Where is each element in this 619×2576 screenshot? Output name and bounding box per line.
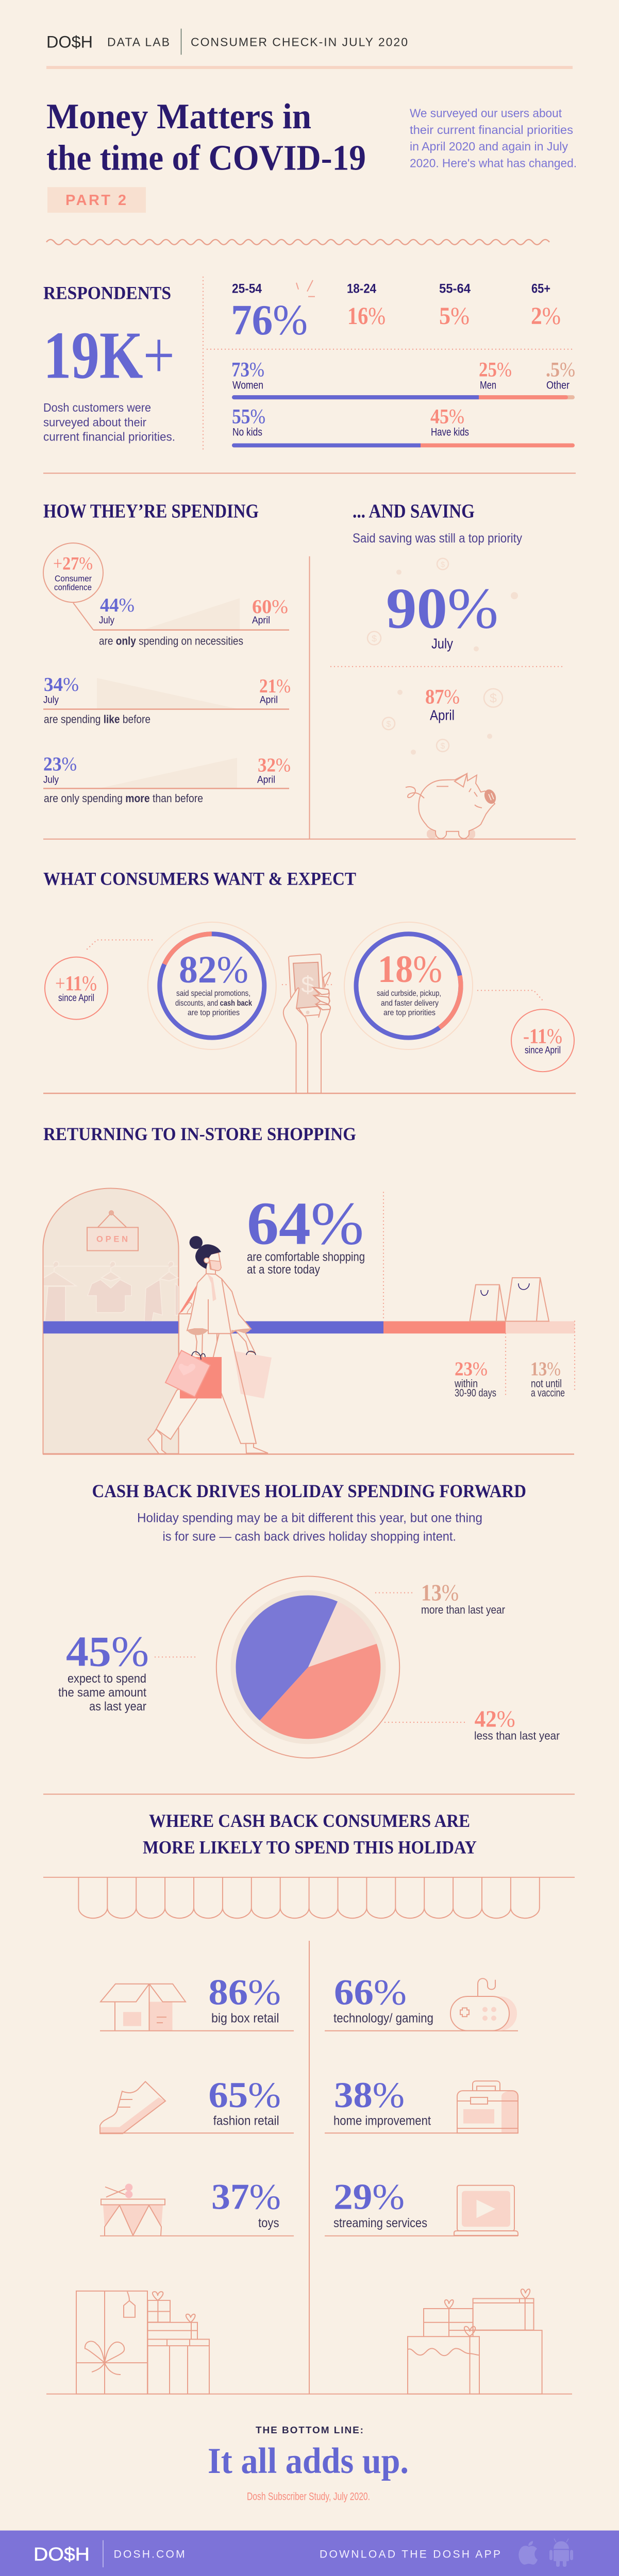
ring: 82 percent: are top priorities (188, 1009, 240, 1018)
row: more than before: 32% (258, 755, 291, 776)
23 percent stat: 30-90 days (455, 1387, 496, 1399)
gender split: Women (232, 379, 263, 391)
age groups: 2% (531, 302, 561, 330)
23 percent stat: within (454, 1378, 478, 1390)
kids split: 55% (232, 405, 265, 428)
panel: wants and expectations (45, 917, 574, 1093)
row: like before: April (260, 694, 278, 706)
panel: toys: 37% (211, 2176, 281, 2217)
website: DOSH.COM (114, 2548, 185, 2560)
panel: and saving (331, 500, 564, 839)
icon: piggy bank (406, 774, 498, 839)
intro paragraph: We surveyed our users about (410, 106, 562, 120)
row: necessities: 44% (100, 595, 135, 616)
april stat (425, 685, 460, 723)
clothes on rail (45, 1280, 178, 1321)
heading: what consumers want: WHAT CONSUMERS WANT & EXPECT (43, 869, 356, 889)
panel: streaming services: 29% (333, 2176, 405, 2217)
age groups: 5% (439, 302, 470, 330)
row: more than before: July (43, 774, 59, 785)
consumer confidence callout: confidence (54, 582, 92, 592)
intro paragraph: in April 2020 and again in July (410, 140, 568, 153)
title (46, 97, 366, 178)
label: 45 percent: the same amount (58, 1686, 146, 1700)
gender split (231, 358, 575, 399)
part 2 badge: PART 2 (65, 192, 126, 209)
callout: plus 11: +11% (55, 972, 97, 995)
ring: 82 percent: 82% (179, 948, 248, 991)
footer band (0, 2531, 619, 2576)
panel: technology and gaming (325, 1972, 518, 2031)
heading: holiday spending: CASH BACK DRIVES HOLIDAY SPENDING FORWARD (92, 1481, 526, 1501)
description (43, 401, 175, 443)
panel: technology and gaming: 66% (334, 1972, 407, 2012)
icon: box (101, 1984, 186, 2031)
panel: fashion retail (100, 2074, 294, 2133)
download call to action: DOWNLOAD THE DOSH APP (320, 2548, 500, 2560)
callout: minus 11 (478, 990, 574, 1072)
right bag (233, 1351, 272, 1398)
panel: how they're spending (43, 500, 291, 805)
panel: big box retail: big box retail (211, 2011, 279, 2026)
label: 13 percent: more than last year (421, 1603, 505, 1616)
heading: where cash back consumers: MORE LIKELY TO SPEND THIS HOLIDAY (143, 1837, 477, 1858)
label: 45 percent: as last year (89, 1700, 146, 1714)
row: more than before: are only spending more than before (44, 792, 203, 805)
shopper illustration (148, 1236, 272, 1454)
july stat: July (431, 636, 453, 651)
holiday intro (137, 1511, 482, 1544)
panel: fashion retail: fashion retail (213, 2114, 279, 2128)
13 percent stat (530, 1359, 565, 1399)
ring: 18 percent (344, 922, 473, 1049)
row: necessities (93, 595, 289, 647)
april stat: April (430, 707, 455, 723)
coat (187, 1274, 251, 1333)
description: surveyed about their (43, 416, 146, 429)
kids split: No kids (232, 427, 262, 438)
row: necessities: 60% (252, 596, 288, 618)
64 percent stat: are comfortable shopping (247, 1250, 365, 1264)
subheading: Said saving was still a top priority (353, 531, 522, 546)
icon: toolbox (457, 2081, 518, 2133)
part 2 badge (47, 187, 146, 213)
ring: 18 percent: and faster delivery (381, 999, 439, 1008)
gender split: 25% (479, 358, 512, 381)
gender split: Other (546, 379, 570, 391)
bottom line (208, 2425, 409, 2503)
13 percent stat: a vaccine (531, 1387, 565, 1399)
floating coins: $ (372, 634, 377, 644)
label: 13 percent (376, 1580, 505, 1616)
pie chart (216, 1577, 399, 1758)
hand holding phone: $ (301, 972, 314, 997)
heading: RESPONDENTS (43, 283, 171, 303)
icon: shopping bags (470, 1278, 549, 1321)
heading: where cash back consumers (143, 1810, 477, 1858)
13 percent stat: not until (531, 1378, 562, 1390)
row: like before: July (43, 694, 59, 706)
data lab label: DATA LAB (107, 35, 170, 48)
23 percent stat (454, 1359, 496, 1399)
description: current financial priorities. (43, 430, 175, 443)
big number: 19K+ (43, 318, 175, 393)
bags (180, 1357, 222, 1398)
heading: where cash back consumers: WHERE CASH BACK CONSUMERS ARE (149, 1810, 470, 1831)
wave divider (46, 240, 549, 245)
64 percent stat: at a store today (247, 1263, 320, 1277)
label: 42 percent: 42% (475, 1706, 515, 1732)
ring: 18 percent: said curbside, pickup, (377, 989, 441, 998)
intro paragraph (410, 106, 577, 170)
footer logo: DO$H (34, 2544, 90, 2565)
callout: plus 11 (45, 940, 152, 1020)
july stat: 90% (386, 577, 498, 641)
13 percent stat: 13% (530, 1359, 561, 1380)
consumer confidence callout: +27% (53, 553, 93, 574)
title: Money Matters in (46, 97, 311, 137)
panel: streaming services (325, 2176, 518, 2236)
label: 42 percent: less than last year (474, 1729, 560, 1742)
panel: big box retail (100, 1972, 294, 2031)
panel: respondents (43, 277, 575, 450)
heading: HOW THEY’RE SPENDING (43, 500, 259, 522)
row: necessities: April (252, 615, 270, 626)
64 percent stat: 64% (247, 1189, 364, 1258)
storefront arch (43, 1188, 178, 1454)
intro paragraph: their current financial priorities (410, 123, 573, 137)
floating coins: $ (441, 742, 445, 751)
row: more than before (43, 754, 291, 805)
logo: DO$H (46, 32, 93, 51)
holiday intro: is for sure — cash back drives holiday shopping intent. (163, 1529, 456, 1544)
ring: 18 percent: are top priorities (383, 1009, 436, 1018)
consumer confidence callout: Consumer (55, 573, 92, 583)
panel: in-store shopping (43, 1188, 575, 1454)
intro paragraph: 2020. Here's what has changed. (410, 157, 577, 170)
stacked bar (43, 1321, 575, 1333)
april stat: 87% (425, 685, 460, 708)
row: like before: 34% (44, 674, 79, 696)
floating coins: $ (387, 720, 391, 728)
kicker: THE BOTTOM LINE: (256, 2425, 363, 2436)
panel: home improvement: 38% (334, 2074, 405, 2115)
floating coins (367, 558, 518, 755)
panel: fashion retail: 65% (208, 2074, 281, 2115)
panel: home improvement: home improvement (333, 2114, 431, 2128)
heading: ... AND SAVING (353, 500, 475, 522)
row: necessities: are only spending on necessities (99, 635, 243, 647)
age groups: 25-54 (232, 282, 262, 296)
row: like before (43, 674, 291, 725)
open sign (87, 1211, 138, 1251)
callout: plus 11: since April (58, 992, 94, 1004)
label: 13 percent: 13% (421, 1580, 459, 1605)
icon: game controller (450, 1978, 517, 2031)
title: the time of COVID-19 (46, 139, 366, 178)
age groups: 55-64 (439, 282, 471, 296)
ring: 82 percent: said special promotions, (176, 989, 250, 998)
kids split: 45% (430, 405, 464, 428)
panel: streaming services: streaming services (333, 2216, 427, 2230)
row: more than before: April (257, 774, 275, 785)
head (206, 1263, 215, 1274)
icon: apple (518, 2541, 538, 2565)
kids split (232, 405, 575, 447)
label: 42 percent (385, 1706, 560, 1742)
report name: CONSUMER CHECK-IN JULY 2020 (191, 35, 408, 48)
row: more than before: 23% (43, 754, 77, 775)
description: Dosh customers were (43, 401, 151, 414)
panel: technology and gaming: technology/ gaming (333, 2011, 433, 2026)
floating coins: $ (490, 691, 497, 706)
row: like before: 21% (259, 675, 291, 697)
ring: 82 percent: discounts, and cash back (175, 999, 252, 1008)
icon: sneaker (100, 2081, 165, 2133)
consumer confidence callout (43, 543, 103, 630)
conclusion: It all adds up. (208, 2440, 409, 2481)
row: like before: are spending like before (44, 713, 150, 725)
heading: returning to in-store: RETURNING TO IN-STORE SHOPPING (43, 1124, 356, 1144)
gender split: 73% (231, 358, 264, 381)
open sign: OPEN (96, 1235, 128, 1244)
23 percent stat: 23% (455, 1359, 488, 1380)
panel: big box retail: 86% (208, 1972, 281, 2012)
age groups: 65+ (531, 282, 550, 296)
floating coins: $ (441, 561, 445, 569)
ring: 82 percent (142, 917, 281, 1055)
hand holding phone (282, 954, 334, 1093)
icon: video screen (454, 2185, 518, 2235)
header: logo and report name (46, 29, 408, 55)
age groups (231, 280, 561, 344)
row: necessities: July (99, 615, 114, 626)
callout: minus 11: -11% (523, 1025, 562, 1048)
icon: toy drum (101, 2183, 165, 2235)
holiday intro: Holiday spending may be a bit different this year, but one thing (137, 1511, 482, 1526)
icon: android (549, 2539, 573, 2567)
panel: home improvement (325, 2074, 518, 2133)
callout: minus 11: since April (525, 1045, 561, 1056)
gifts left (76, 2291, 209, 2394)
label: 45 percent (58, 1628, 198, 1714)
gifts right (408, 2289, 542, 2394)
awning (43, 1877, 575, 1918)
panel: toys: toys (258, 2216, 279, 2230)
ring: 18 percent: 18% (378, 948, 442, 991)
kids split: Have kids (431, 427, 469, 438)
legs (156, 1333, 256, 1444)
age groups: 76% (231, 296, 308, 344)
source: Dosh Subscriber Study, July 2020. (247, 2491, 370, 2503)
age groups: 18-24 (347, 282, 376, 296)
gender split: .5% (546, 358, 575, 381)
label: 45 percent: expect to spend (68, 1672, 146, 1686)
panel: toys (100, 2176, 294, 2236)
label: 45 percent: 45% (66, 1628, 149, 1675)
age groups: 16% (347, 302, 386, 330)
gender split: Men (480, 379, 496, 391)
arms (194, 1329, 203, 1357)
